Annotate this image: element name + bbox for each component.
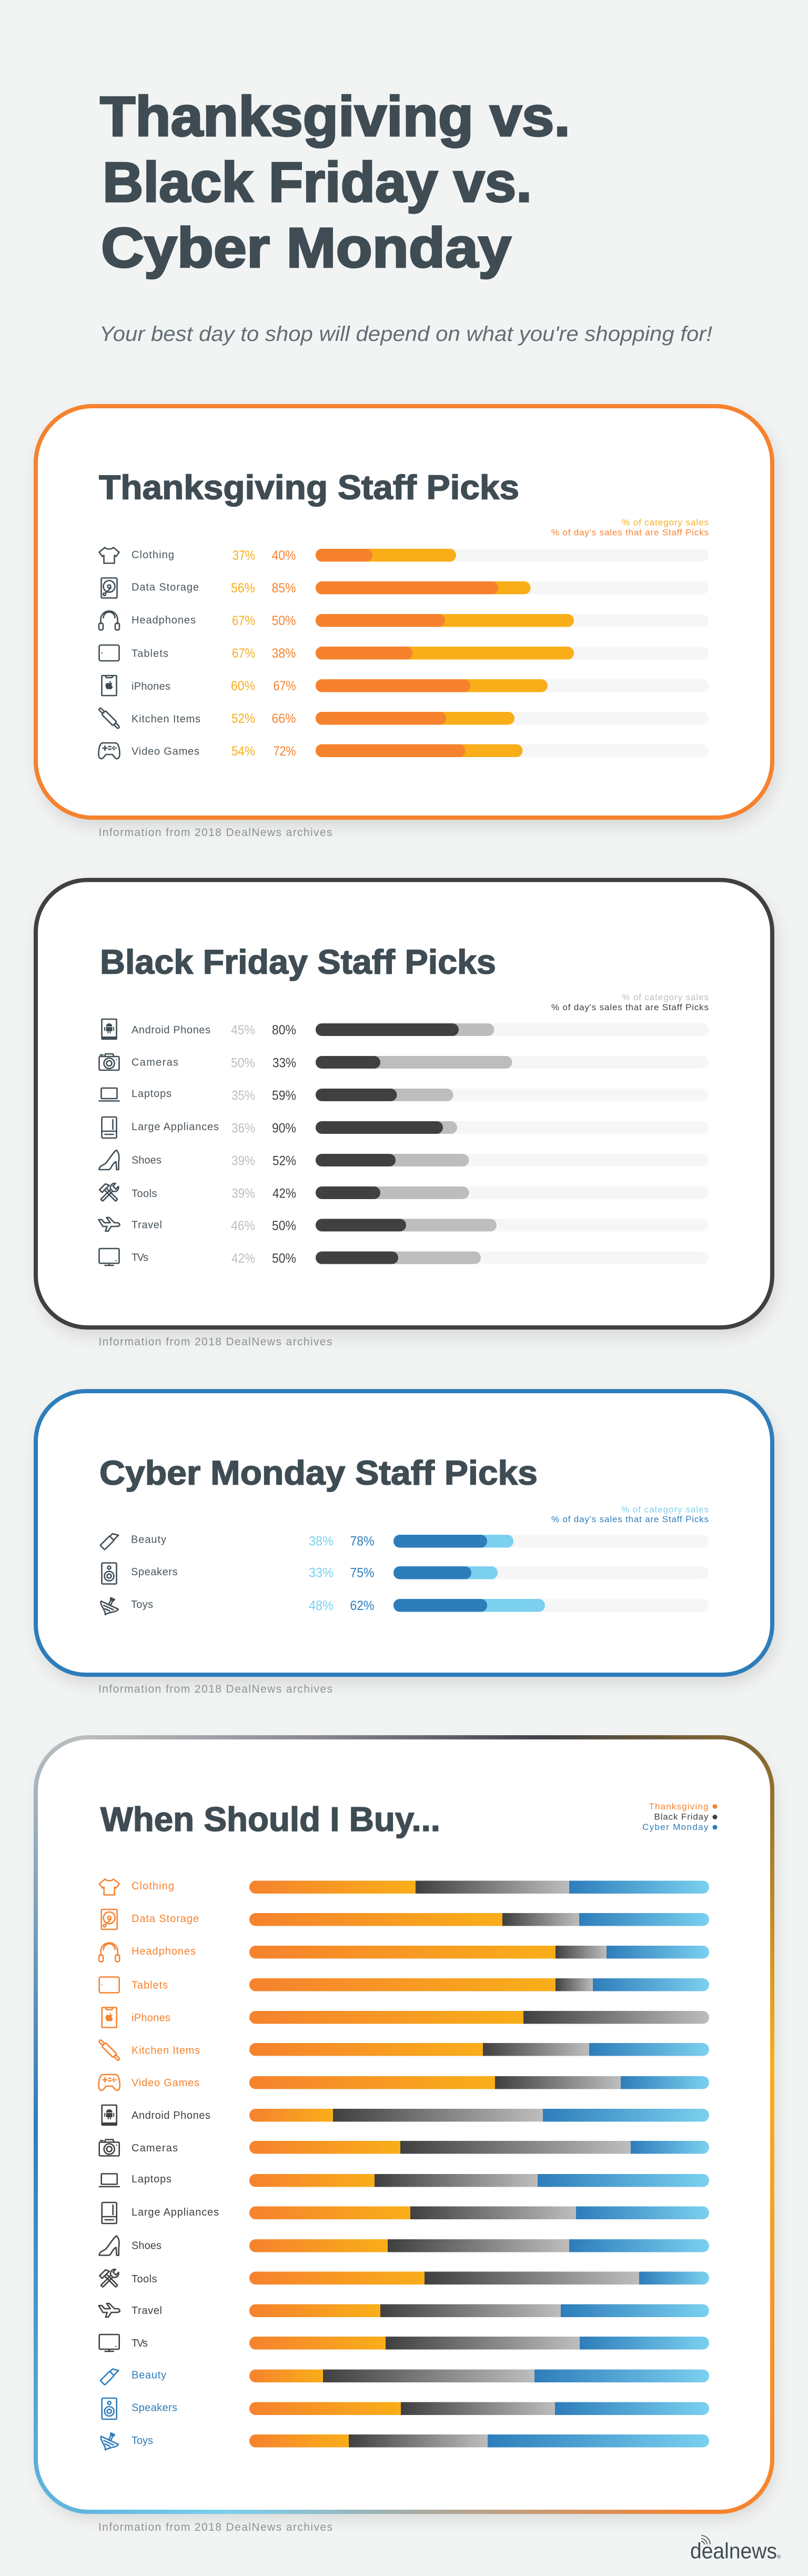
row: Tools [99,1182,709,1204]
title: Black Friday vs. [103,150,532,214]
row: Shoes [99,1150,709,1170]
card: When Should I Buy [36,1737,772,2512]
row: TVs: 42% [231,1251,255,1266]
category icons and labels [97,1879,219,2454]
category icons and labels: Data Storage [132,1913,199,1925]
row: Large Appliances: Large Appliances [132,1121,219,1133]
gradient border [36,1737,772,2512]
category icons and labels: Tablets [132,1979,168,1991]
panel: Cyber Monday staff picks [36,1391,772,1675]
logo: dealnews: ® [777,2554,781,2560]
row: Tools: Tools [132,1188,157,1200]
row: Cameras: 50% [231,1055,255,1070]
row: Video Games [99,743,709,759]
category icons and labels: Laptops [132,2174,171,2185]
row: Kitchen Items [98,707,709,730]
category icons and labels: Travel [132,2305,162,2317]
row: Clothing: Clothing [132,549,174,561]
logo: dealnews: dealnews [690,2538,777,2563]
row: Tablets [99,645,709,661]
row: Travel: 46% [231,1219,255,1233]
panel: Thanksgiving staff picks [36,406,772,818]
row: Android Phones [102,1019,709,1039]
legend: Cyber Monday: % of category sales [621,1505,709,1514]
category icons and labels: Cameras [132,2142,178,2154]
row: Video Games: Video Games [132,746,199,758]
row: Speakers: 33% [309,1566,334,1581]
category icons and labels: Headphones [132,1946,196,1957]
title: Thanksgiving vs. [100,85,570,148]
card: Thanksgiving [36,406,772,818]
row: Laptops [99,1088,709,1103]
row: Beauty: 78% [350,1534,375,1549]
category icons and labels: Kitchen Items [132,2045,200,2056]
row: Tablets: 38% [271,646,296,661]
row: Android Phones: 80% [272,1023,296,1038]
row: Shoes: Shoes [132,1154,161,1166]
row: Headphones: 67% [232,613,255,628]
legend: Cyber Monday: % of day's sales that are Staff Picks [551,1514,709,1524]
row: Cameras: Cameras [132,1056,178,1068]
row: Large Appliances [102,1117,709,1138]
legend: shopping days [642,1802,718,1832]
row: TVs: 50% [272,1251,296,1266]
row: Cameras: 33% [272,1055,296,1070]
row: Data Storage: 56% [231,581,255,596]
source note: Cyber Monday: Information from 2018 DealNews archives [98,1683,332,1695]
row: Laptops: 35% [231,1088,255,1103]
row: iPhones [102,676,709,696]
heading: Thanksgiving Staff Picks: Thanksgiving Staff Picks [99,468,519,506]
row: Clothing [99,547,709,563]
legend: Black Friday: % of day's sales that are Staff Picks [551,1002,709,1012]
category icons and labels: Beauty [132,2370,166,2381]
row: Toys: Toys [131,1599,153,1611]
row: Data Storage: Data Storage [132,582,199,593]
category icons and labels: Speakers [132,2402,177,2414]
title: Cyber Monday [101,216,511,279]
row: Shoes: 39% [231,1153,255,1168]
row: Laptops: 59% [272,1088,296,1103]
row: Tablets: Tablets [132,648,168,660]
row: Clothing: 40% [271,548,296,563]
row: Beauty [100,1531,709,1549]
heading: Black Friday Staff Picks: Black Friday Staff Picks [100,943,496,981]
row: iPhones: iPhones [132,681,170,692]
row: Video Games: 72% [274,744,296,759]
source note: Thanksgiving: Information from 2018 DealNews archives [99,827,332,839]
row: TVs: TVs [132,1252,148,1264]
row: Large Appliances: 36% [231,1121,255,1135]
row: iPhones: 60% [231,679,255,693]
row: Headphones: 50% [271,613,296,628]
stacked bars [249,1880,709,2448]
row: Beauty: Beauty [131,1534,166,1546]
row: Headphones: Headphones [132,615,196,626]
row: Tools: 39% [231,1186,255,1201]
heading: Cyber Monday Staff Picks: Cyber Monday Staff Picks [99,1453,538,1492]
category icons and labels: Tools [132,2273,157,2285]
source note: When Should I Buy: Information from 2018 DealNews archives [98,2521,332,2533]
row: iPhones: 67% [274,679,296,693]
subtitle: Your best day to shop will depend on what you're shopping for! [99,323,712,346]
row: Travel: Travel [132,1220,162,1231]
panel: When Should I Buy [36,1737,772,2512]
row: Kitchen Items: 66% [271,711,296,726]
row: Toys: 48% [309,1598,334,1613]
row: Shoes: 52% [272,1153,296,1168]
row: Cameras [99,1054,709,1070]
row: Android Phones: 45% [231,1023,255,1038]
row: Clothing: 37% [233,548,255,563]
row: Kitchen Items: 52% [231,711,255,726]
category icons and labels: Large Appliances [132,2207,219,2218]
row: Headphones [99,611,709,630]
heading: When Should I Buy...: When Should I Buy... [100,1800,440,1838]
row: Travel: 50% [272,1219,296,1233]
legend: Thanksgiving [551,518,709,538]
row: TVs [99,1249,709,1266]
panel: Black Friday staff picks [36,880,772,1327]
legend: Cyber Monday [551,1505,709,1524]
card: Black Friday [36,880,772,1327]
category icons and labels: iPhones [132,2012,170,2024]
row: Speakers: Speakers [131,1566,178,1578]
category icons and labels: Toys [132,2435,153,2447]
category icons and labels: Shoes [132,2240,161,2252]
category icons and labels: Clothing [132,1880,174,1892]
row: Beauty: 38% [309,1534,334,1549]
title [100,85,570,279]
row: Large Appliances: 90% [272,1121,296,1135]
category icons and labels: TVs [132,2338,148,2349]
category icons and labels: Video Games [132,2077,199,2089]
legend: Black Friday: % of category sales [622,992,709,1002]
row: Kitchen Items: Kitchen Items [132,713,200,725]
row: Speakers: 75% [350,1566,375,1581]
row: Tools: 42% [272,1186,296,1201]
row: Toys: 62% [350,1598,375,1613]
row: Speakers [102,1563,709,1584]
row: Data Storage [101,578,709,598]
row: Travel [99,1217,709,1233]
row: Video Games: 54% [231,744,255,759]
legend: Thanksgiving: % of day's sales that are Staff Picks [551,527,709,538]
row: Toys [97,1594,709,1618]
legend: shopping days: Cyber Monday [642,1822,709,1832]
row: Data Storage: 85% [271,581,296,596]
card: Cyber Monday [36,1391,772,1675]
legend: Black Friday [551,992,709,1012]
row: Android Phones: Android Phones [132,1024,210,1036]
row: Tablets: 67% [232,646,255,661]
legend: Thanksgiving: % of category sales [622,518,709,527]
source note: Black Friday: Information from 2018 DealNews archives [99,1336,332,1348]
legend: shopping days: Black Friday [654,1812,709,1822]
row: Laptops: Laptops [132,1088,171,1100]
category icons and labels: Android Phones [132,2110,210,2121]
legend: shopping days: Thanksgiving [649,1802,708,1812]
